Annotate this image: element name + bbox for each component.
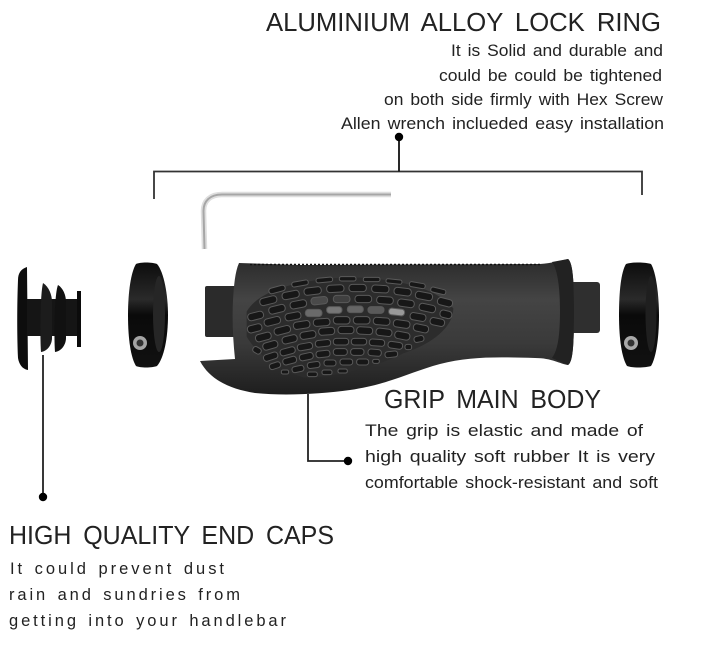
text block: grip description: The grip is elastic and made of xyxy=(365,422,643,440)
text block: lock ring description: Allen wrench inclueded easy installation xyxy=(341,115,664,133)
icon: right lock ring xyxy=(619,262,659,368)
text block: end caps description: It could prevent dust xyxy=(10,560,224,578)
icon: hex wrench xyxy=(204,194,391,249)
text block: end caps description: getting into your handlebar xyxy=(9,612,286,630)
icon: left lock ring xyxy=(128,262,168,368)
icon: end cap xyxy=(17,267,81,370)
heading: grip main body: GRIP MAIN BODY xyxy=(384,384,601,414)
callout line: grip main body xyxy=(308,394,352,465)
grip foam end: left xyxy=(205,286,237,337)
text block: grip description: comfortable shock-resistant and soft xyxy=(365,474,658,492)
callout bracket: lock rings xyxy=(154,133,642,199)
text block: end caps description: rain and sundries from xyxy=(9,586,240,604)
text block: grip description: high quality soft rubber It is very xyxy=(365,448,656,466)
text block: end caps description xyxy=(9,560,286,630)
honeycomb grip pattern xyxy=(247,277,453,377)
text block: lock ring description: could be could be tightened xyxy=(439,67,662,85)
callout line: end caps xyxy=(39,355,47,501)
heading: aluminium alloy lock ring: ALUMINIUM ALLOY LOCK RING xyxy=(266,7,661,37)
text block: lock ring description xyxy=(341,42,664,133)
grip main body xyxy=(200,259,574,394)
heading: high quality end caps: HIGH QUALITY END CAPS xyxy=(9,520,334,550)
grip foam end: right xyxy=(570,282,600,333)
text block: lock ring description: It is Solid and durable and xyxy=(451,42,663,60)
text block: grip description xyxy=(365,422,658,492)
text block: lock ring description: on both side firmly with Hex Screw xyxy=(384,91,663,109)
